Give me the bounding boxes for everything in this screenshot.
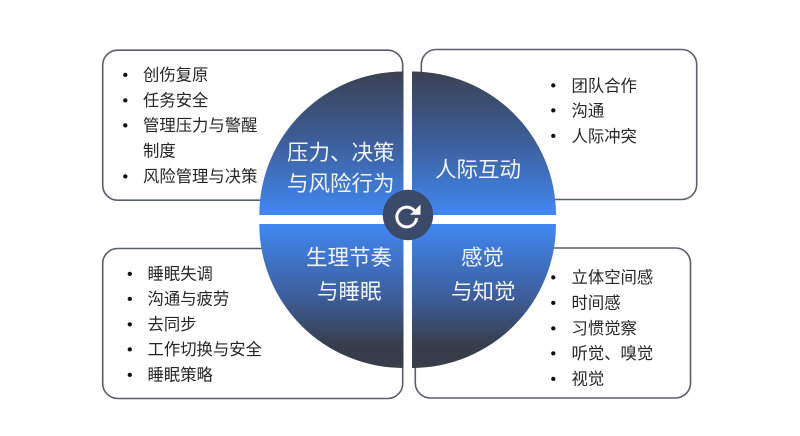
list: bottom-right items: 视觉 <box>572 370 604 388</box>
heading: physiological rhythm: 生理节奏 <box>306 246 392 270</box>
panel: bottom-right list <box>415 248 690 398</box>
list: top-left items: 制度 <box>143 142 176 160</box>
list: bottom-left items: 睡眠失调 <box>148 266 213 284</box>
icon: center refresh <box>383 190 433 240</box>
list: top-right items <box>550 78 637 146</box>
list: bottom-right items <box>550 269 653 388</box>
list: bottom-right items: • <box>550 371 556 388</box>
list: top-left items: • <box>122 67 128 84</box>
list: bottom-right items: • <box>550 270 556 286</box>
list: bottom-right items: • <box>550 346 556 362</box>
list: bottom-left items: • <box>127 316 133 334</box>
list: bottom-right items: • <box>550 295 556 312</box>
list: top-left items: • <box>122 168 128 186</box>
panel: top-right list <box>421 50 697 200</box>
quadrant: interpersonal <box>412 72 556 215</box>
list: top-right items: 沟通 <box>572 102 604 120</box>
quadrant: perception <box>412 224 556 368</box>
list: top-left items: 创伤复原 <box>143 66 208 84</box>
list: bottom-left items: 工作切换与安全 <box>148 341 262 359</box>
panel: top-left list <box>103 50 403 200</box>
list: bottom-left items: 沟通与疲劳 <box>148 290 229 308</box>
list: bottom-right items: • <box>550 320 556 338</box>
list: bottom-left items: • <box>127 266 133 283</box>
quadrant: physiological rhythm: 与睡眠 <box>317 280 382 304</box>
quadrant: perception: 与知觉 <box>451 280 516 304</box>
list: top-left items: 风险管理与决策 <box>143 168 257 186</box>
list: bottom-right items: 习惯觉察 <box>572 320 637 338</box>
list: top-left items: • <box>122 92 128 110</box>
list: top-right items: 人际冲突 <box>572 128 637 146</box>
list: top-right items: • <box>550 102 556 120</box>
list: bottom-left items: • <box>127 291 133 308</box>
list: bottom-right items: 时间感 <box>572 294 621 312</box>
quadrant: pressure and decision: 与风险行为 <box>287 172 395 196</box>
list: top-left items: 任务安全 <box>143 92 208 110</box>
list: top-left items <box>122 66 257 186</box>
list: bottom-right items: 听觉、嗅觉 <box>572 345 653 363</box>
list: top-right items: • <box>550 128 556 145</box>
list: bottom-left items: • <box>127 367 133 384</box>
list: bottom-left items: 去同步 <box>148 316 197 334</box>
list: bottom-left items: • <box>127 342 133 358</box>
list: bottom-right items: 立体空间感 <box>572 269 653 287</box>
quadrant: physiological rhythm <box>259 224 404 368</box>
list: bottom-left items: 睡眠策略 <box>148 366 214 384</box>
heading: perception: 感觉 <box>461 246 504 270</box>
list: top-right items: 团队合作 <box>572 78 637 96</box>
list: top-right items: • <box>550 78 556 94</box>
list: bottom-left items <box>127 266 262 384</box>
list: top-left items: 管理压力与警醒 <box>143 117 257 135</box>
panel: bottom-left list <box>103 248 403 398</box>
heading: pressure and decision: 压力、决策 <box>287 141 395 165</box>
list: top-left items: • <box>122 118 128 134</box>
heading: interpersonal: 人际互动 <box>435 158 521 182</box>
quadrant: pressure and decision <box>259 72 404 215</box>
